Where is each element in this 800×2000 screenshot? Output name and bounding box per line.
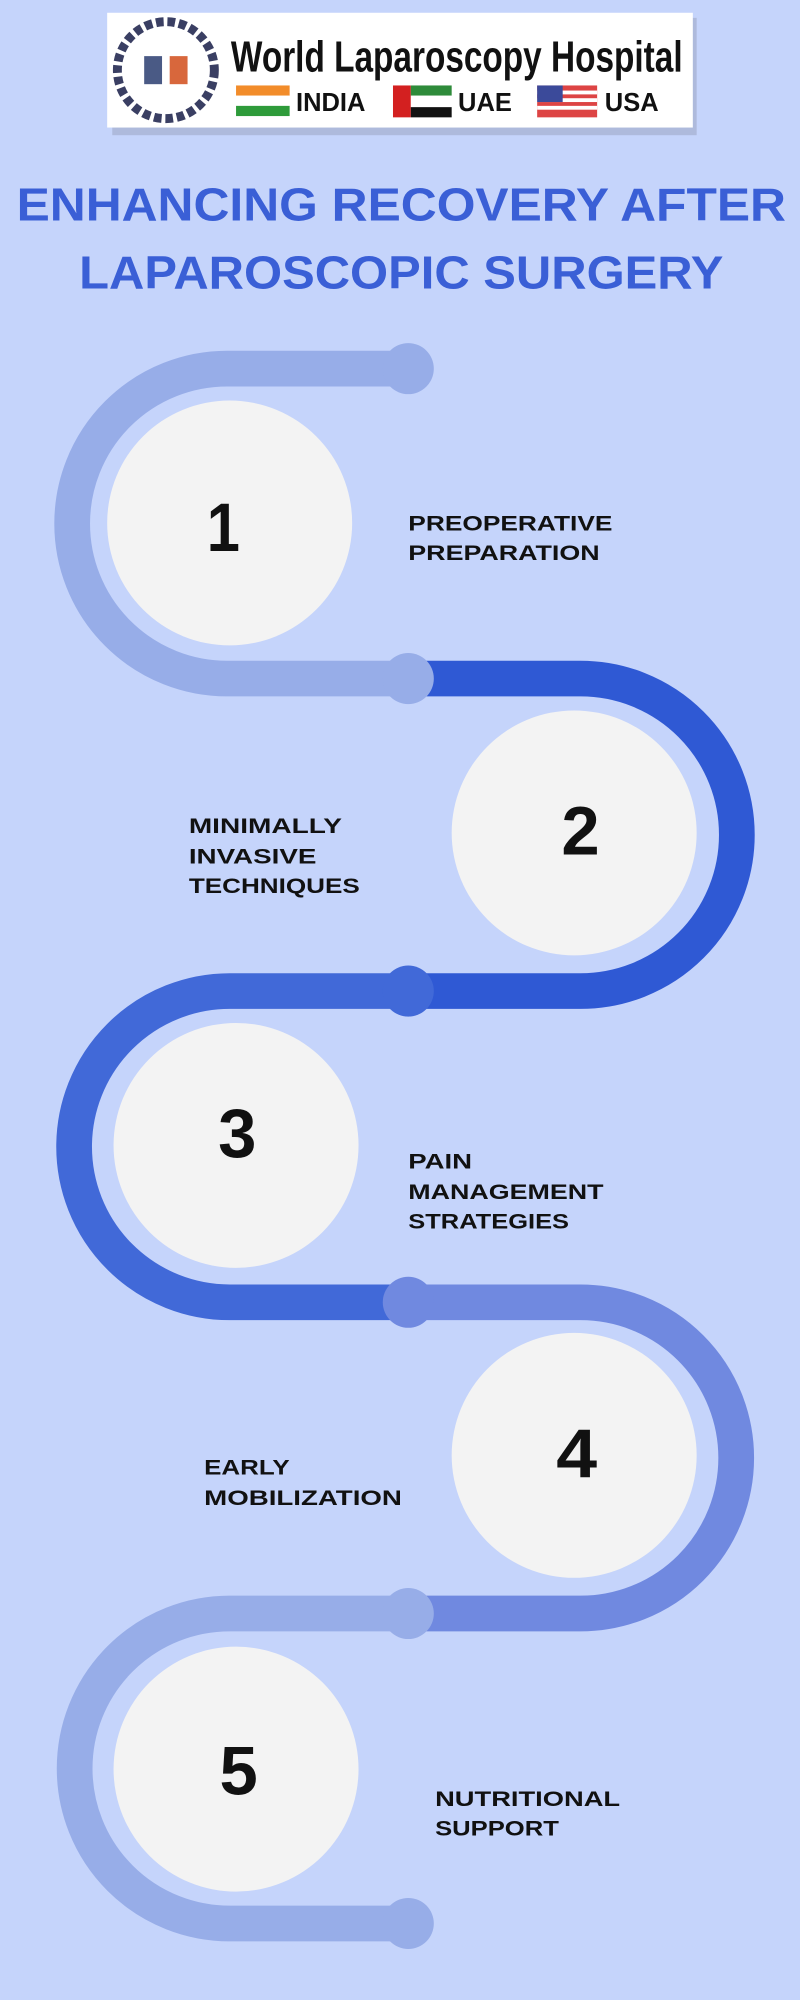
step 1: PREOPERATIVE: [408, 511, 612, 536]
flags row: USA: [605, 89, 659, 117]
joint dots: [383, 343, 434, 1949]
logo banner: [107, 13, 697, 135]
step 4: EARLY: [204, 1454, 290, 1479]
step 5: [114, 1647, 620, 1892]
step 2: 2: [561, 793, 600, 870]
step 1: [107, 401, 612, 645]
step 2: INVASIVE: [189, 844, 316, 869]
step 4: MOBILIZATION: [204, 1485, 402, 1510]
step 3: 3: [218, 1095, 256, 1172]
step 3: [114, 1023, 604, 1268]
title: ENHANCING RECOVERY AFTER: [17, 179, 786, 231]
step 1: 1: [207, 489, 240, 566]
title: [17, 179, 786, 298]
step 3: STRATEGIES: [408, 1208, 569, 1233]
flags row: INDIA: [296, 89, 365, 117]
step 1: PREPARATION: [408, 540, 600, 565]
serpentine track: [72, 369, 737, 1923]
step 5: SUPPORT: [435, 1815, 559, 1840]
flags row: [236, 85, 659, 117]
icon: laurel emblem: [117, 22, 214, 119]
step 5: 5: [219, 1733, 258, 1810]
step 4: [204, 1333, 697, 1578]
step 5: NUTRITIONAL: [435, 1786, 620, 1811]
flags row: UAE: [458, 89, 512, 117]
title: LAPAROSCOPIC SURGERY: [79, 246, 723, 298]
step 3: MANAGEMENT: [408, 1179, 604, 1204]
step 3: PAIN: [408, 1148, 472, 1173]
step 2: [189, 710, 697, 955]
step 2: MINIMALLY: [189, 813, 343, 838]
step 2: TECHNIQUES: [189, 873, 360, 898]
step 4: 4: [556, 1415, 597, 1492]
